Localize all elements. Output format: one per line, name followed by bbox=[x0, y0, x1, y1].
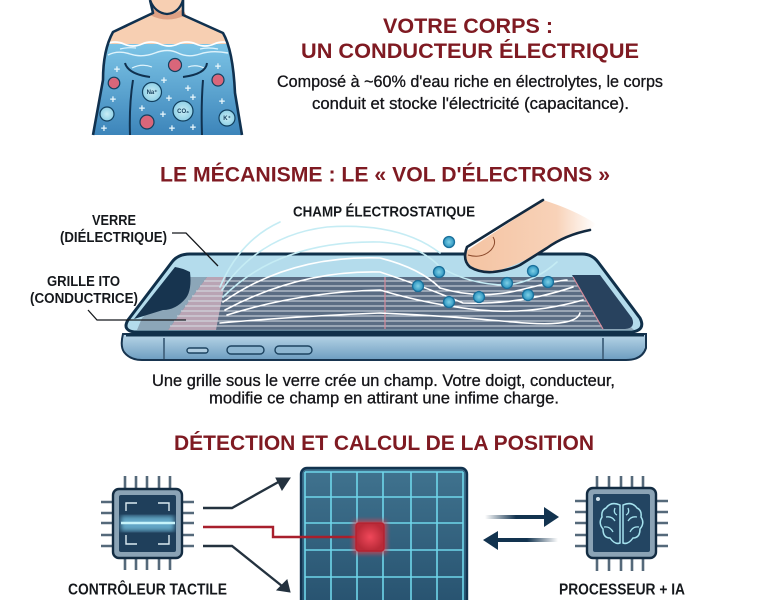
exchange arrows grid and processor bbox=[483, 507, 559, 550]
icon: human body filled with water and electrolytes: Na⁺ bbox=[147, 89, 157, 96]
icon: finger touching the screen bbox=[465, 200, 596, 272]
icon: human body filled with water and electrolytes: + bbox=[110, 94, 116, 106]
icon: human body filled with water and electrolytes: + bbox=[114, 64, 120, 76]
text block: body composition bbox=[277, 73, 663, 113]
icon: human body filled with water and electrolytes: + bbox=[169, 123, 175, 135]
label: processeur + IA: PROCESSEUR + IA bbox=[559, 582, 685, 598]
text block: grid and field explanation: Une grille sous le verre crée un champ. Votre doigt, conducteur, bbox=[152, 372, 615, 390]
icon: human body filled with water and electrolytes: + bbox=[139, 103, 145, 115]
text block: body composition: conduit et stocke l'électricité (capacitance). bbox=[312, 95, 629, 113]
label: verre diélectrique: (DIÉLECTRIQUE) bbox=[60, 229, 167, 246]
touch grid panel bbox=[301, 468, 467, 600]
red signal line to touch point bbox=[203, 527, 360, 537]
icon: human body filled with water and electrolytes: + bbox=[166, 93, 172, 105]
electrostatic field lines bbox=[220, 222, 583, 324]
phone illustration bbox=[122, 222, 646, 360]
icon: touch controller chip bbox=[101, 476, 194, 570]
icon: human body filled with water and electrolytes: + bbox=[215, 61, 221, 73]
ITO conductive grid bbox=[168, 277, 603, 330]
heading: détection et calcul: DÉTECTION ET CALCUL DE LA POSITION bbox=[174, 432, 594, 455]
icon: human body filled with water and electrolytes: + bbox=[185, 83, 191, 95]
title: votre corps bbox=[301, 15, 639, 63]
label: grille ITO conductrice bbox=[30, 274, 186, 320]
icon: human body filled with water and electrolytes: CO₃ bbox=[177, 109, 189, 115]
icon: human body filled with water and electrolytes: + bbox=[190, 122, 196, 134]
electrons bbox=[412, 236, 554, 308]
icon: human body filled with water and electrolytes: + bbox=[160, 109, 166, 121]
text block: body composition: Composé à ~60% d'eau riche en électrolytes, le corps bbox=[277, 73, 663, 91]
icon: human body filled with water and electrolytes: K⁺ bbox=[223, 115, 231, 122]
touch point highlight bbox=[353, 520, 387, 554]
icon: human body filled with water and electrolytes: + bbox=[190, 92, 196, 104]
text block: grid and field explanation bbox=[152, 372, 615, 408]
icon: processor with AI brain bbox=[575, 476, 668, 571]
notch and dark screen corner bbox=[134, 267, 633, 329]
label: grille ITO conductrice: (CONDUCTRICE) bbox=[30, 291, 138, 307]
text block: grid and field explanation: modifie ce champ en attirant une infime charge. bbox=[209, 390, 559, 408]
heading: le mécanisme: LE MÉCANISME : LE « VOL D'ÉLECTRONS » bbox=[160, 164, 610, 186]
label: grille ITO conductrice: GRILLE ITO bbox=[47, 274, 120, 290]
icon: human body filled with water and electrolytes bbox=[92, 0, 244, 136]
icon: human body filled with water and electrolytes: + bbox=[161, 75, 167, 87]
icon: human body filled with water and electrolytes: + bbox=[101, 123, 107, 135]
icon: human body filled with water and electrolytes: + bbox=[219, 96, 225, 108]
arrows from controller to grid bbox=[203, 478, 290, 592]
label: verre diélectrique bbox=[60, 213, 218, 266]
label: champ électrostatique: CHAMP ÉLECTROSTATIQUE bbox=[293, 204, 475, 220]
label: contrôleur tactile: CONTRÔLEUR TACTILE bbox=[68, 580, 227, 598]
label: verre diélectrique: VERRE bbox=[92, 213, 136, 229]
title: votre corps: UN CONDUCTEUR ÉLECTRIQUE bbox=[301, 40, 639, 63]
title: votre corps: VOTRE CORPS : bbox=[383, 15, 553, 38]
